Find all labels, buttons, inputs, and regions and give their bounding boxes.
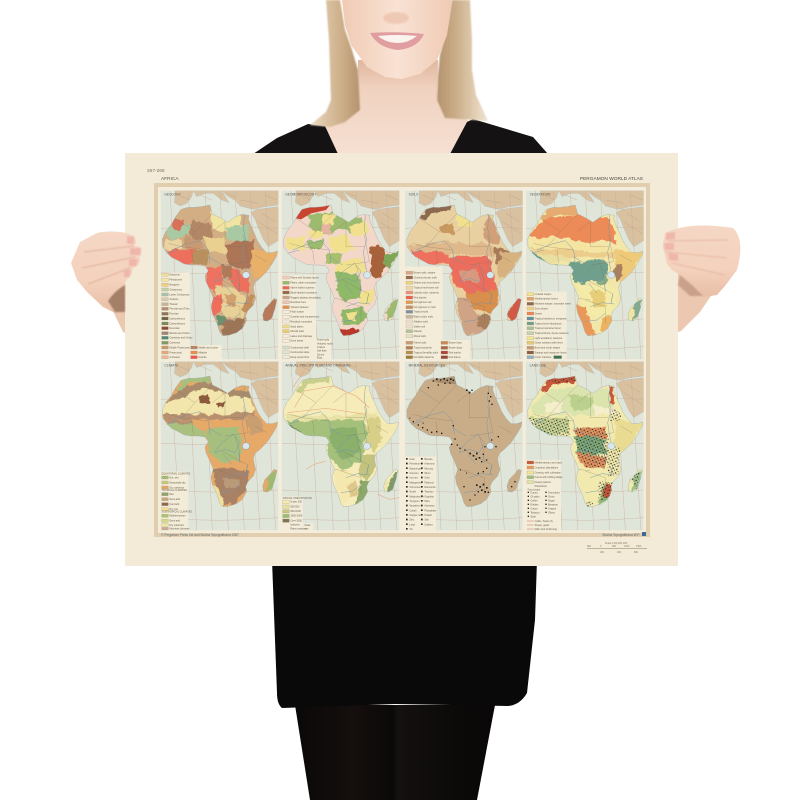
- legend: geology: Carboniferous: [169, 317, 186, 320]
- legend: mineral resources: Uranium: [409, 472, 419, 475]
- legend: land use: Coffee: [530, 500, 538, 503]
- legend: precipitation: Under 250: [290, 501, 303, 504]
- legend: climate: Dry, hot: [169, 508, 178, 511]
- legend: mineral resources: Diamonds: [424, 486, 436, 489]
- legend: climate: Dry, savanna: [169, 486, 184, 489]
- legend: soils: Ferruginous soil: [414, 301, 432, 304]
- legend: land use: Sugar: [548, 500, 555, 503]
- legend: mineral resources: Chromium: [409, 486, 421, 489]
- legend: geomorphology: Volcanic plateau: [290, 306, 309, 309]
- legend: mineral resources: Phosphate: [424, 509, 437, 512]
- legend: vegetation: Grass savanna with trees: [535, 342, 563, 345]
- legend: geology: Holocene: [169, 274, 180, 277]
- legend: climate: Seasonally dry: [169, 481, 186, 484]
- scale bar: Scale 1:50,000,000: [605, 541, 628, 545]
- model: nose shadow: [383, 12, 409, 24]
- heading: geomorphology: GEOMORPHOLOGY: [285, 192, 317, 196]
- page number: 267-268: [147, 168, 165, 174]
- legend: soils: Tropical podzols: [414, 347, 432, 350]
- legend: mineral resources: Natural gas: [409, 467, 423, 470]
- legend: land use: Olives: [548, 512, 556, 515]
- legend: mineral resources: Gold: [424, 477, 430, 480]
- scale bar: 1000: [624, 545, 630, 548]
- legend: precipitation: ANNUAL PRECIPITATION: [283, 497, 312, 500]
- legend: soils: Brown clays: [449, 347, 463, 350]
- legend: climate: Wet: [169, 493, 174, 496]
- map: mineral resources of Africa: [406, 376, 522, 506]
- legend: precipitation: mm: [304, 527, 308, 530]
- atlas frame: [154, 183, 650, 537]
- legend: soils: Brown soils, steppe: [414, 272, 436, 275]
- model: blonde hair left: [310, 0, 360, 127]
- legend: geomorphology: Continental slope: [290, 351, 310, 354]
- legend: soils: Red loams: [449, 356, 461, 359]
- scale bar: 800: [634, 551, 639, 554]
- legend: geomorphology: Plains with Surface layers: [290, 276, 320, 279]
- legend: land use: Sisal: [530, 516, 536, 519]
- heading: Pergamon World Atlas: PERGAMON WORLD ATLAS: [580, 176, 643, 182]
- legend: mineral resources: Vanadium: [409, 505, 420, 508]
- legend: land use: Mediterranean and oasis: [535, 461, 563, 464]
- legend: precipitation: Rainy seasons: [290, 527, 307, 530]
- cartographer note: Służba Topograficzna W.P.: [602, 533, 640, 537]
- legend: geomorphology: Rugged plateau denudation: [290, 296, 321, 299]
- legend: soils: Black cotton soils: [414, 316, 434, 319]
- legend: mineral resources: Nickel: [409, 491, 417, 494]
- legend: geomorphology: Sand plains: [290, 325, 304, 328]
- legend: geology: Permian and Trias: [169, 308, 190, 311]
- legend: geomorphology: Salt flats: [317, 350, 327, 353]
- legend: geology: Granite: [198, 356, 207, 359]
- panel: mineral resources: [403, 362, 526, 531]
- legend: geomorphology: Plains, table mountains: [290, 282, 317, 285]
- legend: mineral resources: [405, 457, 437, 531]
- legend: vegetation: Desert: [535, 312, 542, 315]
- scale bar: 1500: [636, 545, 642, 548]
- legend: soils: Mixed soils: [414, 335, 427, 338]
- legend: land use: Food crops: [528, 488, 541, 491]
- legend: mineral resources: Coal: [409, 458, 415, 461]
- legend: mineral resources: Titanium: [424, 491, 434, 494]
- heading: geology: GEOLOGY: [164, 192, 182, 196]
- legend: geomorphology: Alluvial plain: [290, 330, 305, 333]
- legend: climate: SUBTROPICAL CLIMATES: [162, 511, 192, 514]
- model: smile: [370, 32, 424, 50]
- legend: geomorphology: Lakes and drainage: [290, 335, 313, 338]
- legend: geomorphology: [282, 275, 334, 359]
- scale bar: 200: [600, 551, 605, 554]
- map: geomorphology of Africa: [284, 205, 398, 336]
- scale bar: [587, 541, 647, 554]
- legend: geomorphology: Dune areas: [290, 340, 304, 343]
- legend: geology: Proterozoic: [169, 351, 183, 354]
- legend: geomorphology: Ergs: [317, 356, 323, 359]
- legend: mineral resources: Lead: [409, 523, 415, 526]
- poster sheet: [125, 153, 678, 566]
- legend: climate: Cool arid: [169, 503, 180, 506]
- legend: geology: Neogene: [169, 284, 180, 287]
- legend: precipitation: 500-1000: [290, 510, 301, 513]
- legend: mineral resources: Platinum: [424, 481, 434, 484]
- legend: land use: Grazing, with cultivation: [535, 471, 562, 474]
- legend: mineral resources: Copper ore: [409, 514, 422, 517]
- legend: geomorphology: Residual rises: [290, 301, 307, 304]
- legend: vegetation: Tropical forest, dense savanna: [535, 332, 569, 335]
- model: face: [342, 0, 452, 79]
- legend: soils: Saline soil: [414, 325, 425, 328]
- publisher note: © Pergamon Press Ltd and Służba Topograficzna 1967: [161, 533, 239, 537]
- model: left hand holding sheet: [71, 232, 142, 313]
- scale bar: 500: [612, 545, 617, 548]
- legend: soils: Lateritic soils, savanna: [414, 291, 439, 294]
- legend: geomorphology: Fault scarps: [290, 311, 305, 314]
- legend: vegetation: Tropical montane forest: [535, 327, 561, 330]
- panel: land use: [524, 362, 647, 531]
- legend: land use: Groundnut: [548, 492, 560, 495]
- legend: soils: Red earths: [449, 351, 462, 354]
- legend: geology: Silurian and Ordov.: [169, 332, 191, 335]
- legend: land use: Cocoa: [530, 492, 538, 495]
- legend: climate: Mountain climates: [169, 528, 190, 531]
- legend: mineral resources: Tungsten: [409, 500, 420, 503]
- legend: precipitation: 250-500: [290, 505, 300, 508]
- legend: mineral resources: Asbestos: [424, 505, 435, 508]
- legend: vegetation: Tropical rainforest, evergreen: [535, 317, 568, 320]
- legend: soils: Tropical soils: [414, 311, 429, 314]
- model: legs in black tights: [295, 705, 495, 800]
- legend: mineral resources: Mica: [424, 500, 430, 503]
- legend: geomorphology: Volcanic rocks: [317, 342, 334, 345]
- legend: geomorphology: Continental shelf: [290, 346, 309, 349]
- legend: mineral resources: Graphite: [424, 495, 434, 498]
- legend: land use: Forest with shifting tillage: [535, 476, 563, 479]
- legend: land use: Bananas: [548, 504, 559, 507]
- legend: soils: Forest soils: [414, 342, 427, 345]
- legend: land use: Cropland, plantations: [535, 466, 559, 469]
- heading: annual precipitation and drainage: ANNUAL PRECIPITATION AND DRAINAGE: [285, 363, 351, 367]
- legend: geology: Cretaceous: [169, 288, 183, 291]
- legend: soils: Alkaline soils: [414, 320, 429, 323]
- legend: vegetation: Swamp and mangrove forest: [535, 351, 567, 354]
- legend: geology: Permian: [169, 313, 179, 316]
- legend: mineral resources: Sulphur: [424, 523, 433, 526]
- model: blonde hair right: [437, 0, 488, 121]
- legend: mineral resources: Salt: [424, 519, 429, 522]
- legend: mineral resources: Zinc: [409, 519, 415, 522]
- legend: soils: Alluvial: [414, 330, 422, 333]
- panel: climate: [158, 362, 282, 531]
- heading: soils: SOILS: [409, 192, 418, 196]
- legend: land use: Tobacco: [530, 512, 540, 515]
- heading: climate: CLIMATE: [164, 363, 178, 367]
- heading: vegetation: VEGETATION: [530, 192, 551, 196]
- panel: geology: [158, 191, 282, 359]
- legend: vegetation: [526, 292, 571, 359]
- legend: geology: Cambrian: [169, 342, 181, 345]
- legend: geology: Middle and Lower: [198, 346, 218, 349]
- legend: mineral resources: Tin: [409, 528, 413, 531]
- legend: geology: Lower Cretaceous: [169, 293, 190, 296]
- legend: geology: Cambrian and Ordov.: [169, 337, 193, 340]
- legend: land use: Grapes: [548, 508, 557, 511]
- legend: climate: [161, 472, 192, 531]
- isohyets over sea: [288, 371, 399, 499]
- legend: mineral resources: Molybdenum: [409, 495, 424, 498]
- legend: mineral resources: Manganese: [409, 481, 423, 484]
- legend: precipitation: 1000-2000: [290, 515, 303, 518]
- panel: geomorphology: [279, 191, 403, 359]
- legend: vegetation: Fresh marshes: [535, 356, 552, 359]
- legend: climate: Semi-arid: [169, 498, 181, 501]
- scale bar: 400: [617, 551, 622, 554]
- legend: geomorphology: Residual mountains: [290, 320, 313, 323]
- legend: geology: Jurassic: [169, 298, 179, 301]
- legend: vegetation: Mediterranean forest: [535, 298, 558, 301]
- legend: geomorphology: Fossil soils: [317, 339, 330, 342]
- legend: land use: Rubber: [530, 504, 539, 507]
- legend: soils: Chestnut brown soils: [414, 276, 437, 279]
- model: right hand holding sheet: [663, 226, 740, 297]
- cartographer note: [602, 532, 646, 537]
- heading: land use: LAND USE: [530, 363, 546, 367]
- panel: soils: [403, 191, 526, 359]
- legend: soils: Red laterite: [414, 296, 427, 299]
- legend: land use: Main limit of farming: [535, 528, 558, 531]
- arms behind the sheet: [110, 260, 715, 335]
- legend: geology: Middle Proterozoic: [169, 346, 191, 349]
- legend: mineral resources: Bauxite: [424, 458, 433, 461]
- legend: soils: Ferruginous on rock: [414, 306, 437, 309]
- map: annual precipitation of Africa: [284, 376, 398, 506]
- scale bar: 500: [587, 545, 592, 548]
- panel: vegetation: [524, 191, 647, 359]
- legend: land use: Desert pasture: [535, 481, 552, 484]
- model: black top shoulders: [253, 119, 548, 154]
- legend: mineral resources: Potash: [424, 514, 433, 517]
- legend: land use: Sheep, goats: [535, 524, 550, 527]
- legend: soils: [405, 267, 470, 359]
- mineral deposit markers: [409, 378, 516, 501]
- legend: land use: Citrus: [548, 496, 555, 499]
- heading: mineral resources: MINERAL RESOURCES: [409, 363, 445, 367]
- map: geology of Africa: [162, 205, 278, 336]
- legend: climate: TROPICAL CLIMATES: [162, 489, 187, 492]
- legend: geomorphology: Alpine folded systems: [290, 287, 315, 290]
- legend: land use: [526, 460, 563, 531]
- legend: land use: Cattle, Tsetse fly: [535, 520, 554, 523]
- model: black dress skirt: [272, 560, 537, 708]
- legend: vegetation: Tropical semi-deciduous: [535, 322, 562, 325]
- legend: mineral resources: Antimony: [424, 463, 435, 466]
- legend: geomorphology: Cuestas and escarpments: [290, 316, 320, 319]
- legend: geology: Devonian: [169, 327, 180, 330]
- legend: vegetation: Coastal steppe: [535, 293, 552, 296]
- legend: geology: Triassic: [169, 303, 179, 306]
- legend: geomorphology: Dunes: [317, 353, 325, 356]
- legend: mineral resources: Cobalt: [409, 509, 417, 512]
- legend: geology: Archaean: [169, 356, 181, 359]
- legend: precipitation: Over 2000: [290, 519, 303, 522]
- legend: land use: Cotton: [530, 508, 538, 511]
- legend: climate: Hot, wet: [169, 476, 179, 479]
- legend: geomorphology: Craters: [317, 346, 326, 349]
- legend: climate: Mediterranean: [169, 515, 186, 518]
- legend: vegetation: Bush and scrub steppe: [535, 347, 561, 350]
- scale bar: 0: [600, 545, 602, 548]
- legend: vegetation: Light woodland, savanna: [535, 337, 563, 340]
- map: soils of Africa: [406, 205, 522, 336]
- legend: soils: Ferrallitic savanna: [414, 356, 434, 359]
- legend: geology: Pleistocene: [169, 279, 183, 282]
- map: vegetation of Africa: [528, 205, 643, 336]
- legend: soils: Tropical ferrallitic soils: [414, 351, 439, 354]
- legend: mineral resources: Silver: [424, 472, 431, 475]
- heading: Africa: AFRICA: [161, 176, 179, 182]
- legend: climate: EQUATORIAL CLIMATES: [162, 472, 191, 475]
- legend: geomorphology: Block-faulted mountains: [290, 291, 318, 294]
- model: neck and chest: [322, 60, 470, 156]
- legend: land use: Plantations: [535, 485, 548, 488]
- legend: climate: Semi-arid: [169, 520, 181, 523]
- legend: mineral resources: Mercury: [424, 467, 434, 470]
- panel: annual precipitation and drainage: [279, 362, 403, 530]
- legend: geomorphology: Deep ocean floor: [290, 356, 309, 359]
- legend: climate: Dry subtropic: [169, 524, 185, 527]
- legend: soils: Tropical red-brown soil: [414, 287, 439, 290]
- legend: soils: Desert and semi-desert: [414, 282, 440, 285]
- legend: soils: Brown loam: [449, 342, 462, 345]
- legend: geology: [161, 273, 222, 359]
- map: land use of Africa: [528, 376, 643, 506]
- legend: geology: Carboniferous: [169, 322, 186, 325]
- legend: vegetation: Montane steppe, mountain forest: [535, 303, 571, 306]
- legend: land use: Oil palm: [530, 496, 539, 499]
- legend: precipitation: Scale: [304, 524, 311, 527]
- legend: mineral resources: Iron ore: [409, 477, 419, 480]
- legend: precipitation: Isohyets: [290, 524, 300, 527]
- legend: vegetation: Semi-desert: [535, 307, 548, 310]
- legend: precipitation: [282, 497, 313, 530]
- map: climate of Africa: [162, 376, 278, 506]
- legend: mineral resources: Petroleum: [409, 463, 421, 466]
- legend: geology: Alkaline: [198, 351, 208, 354]
